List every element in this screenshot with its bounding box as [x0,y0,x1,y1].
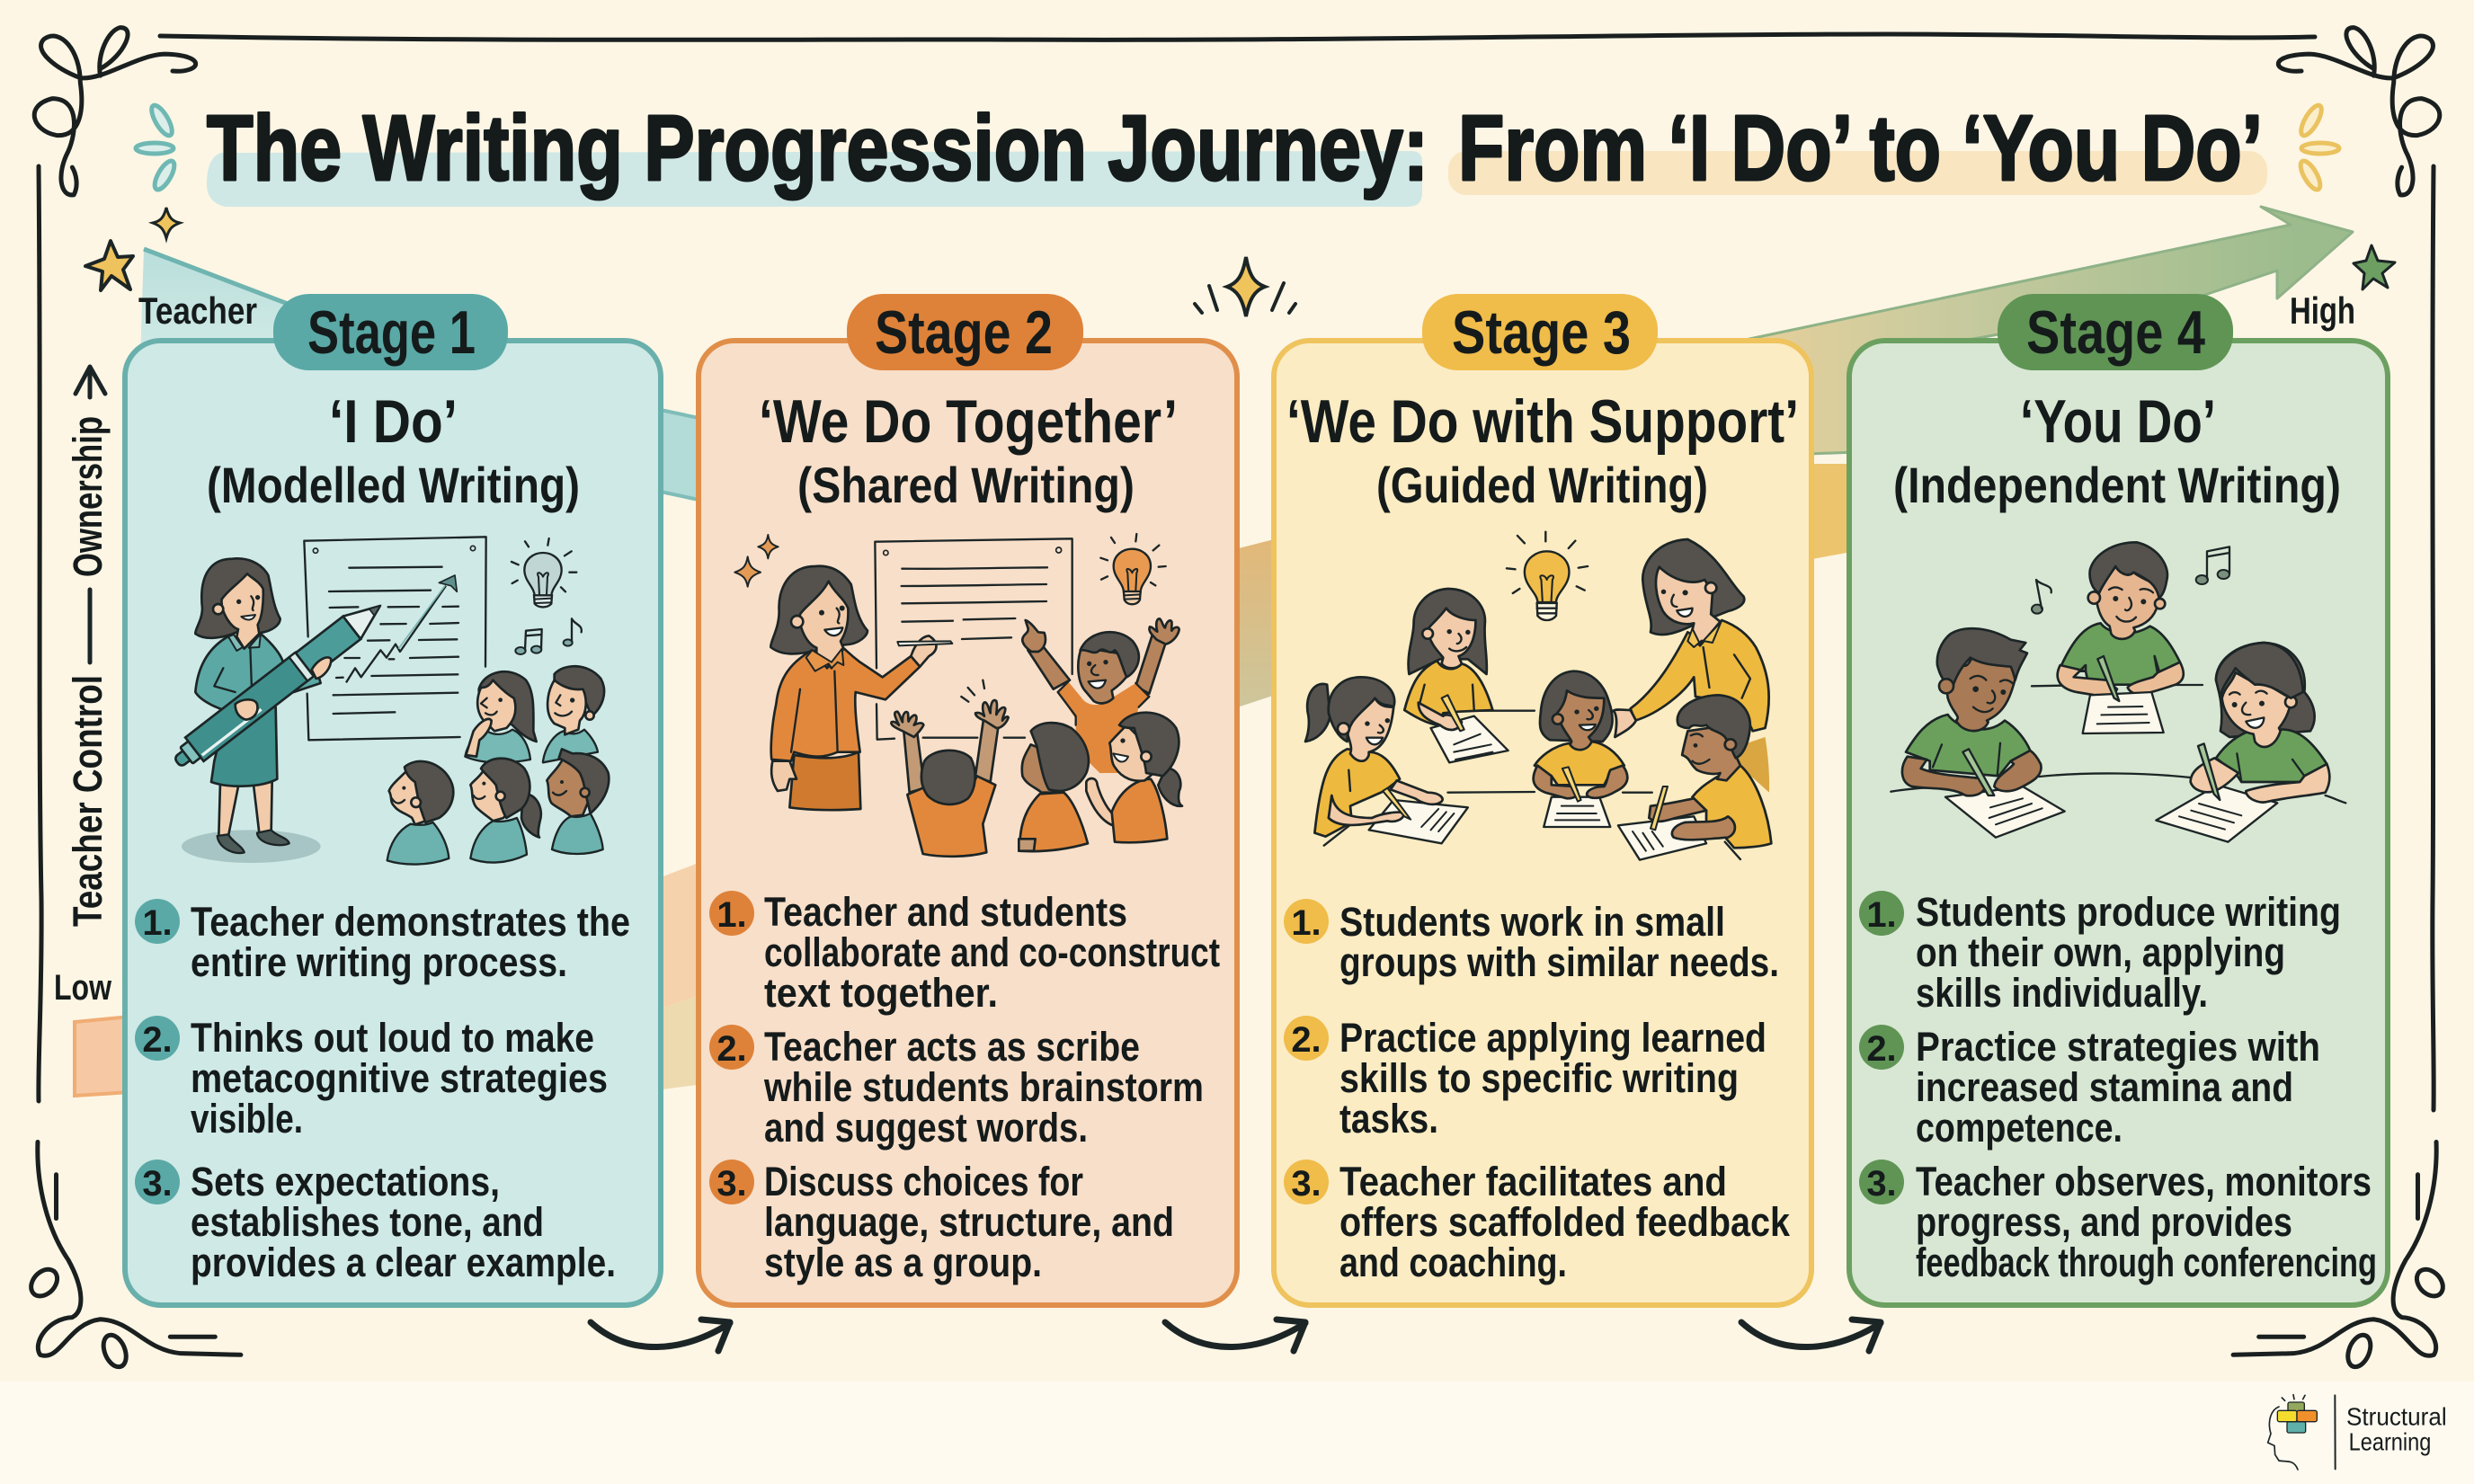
stage badge: Stage 3 [1452,298,1631,367]
hair back [195,558,280,638]
stage badge: Stage 2 [875,298,1053,367]
heading: ‘We Do with Support’ [1286,387,1799,456]
icon: light bulb [512,538,576,607]
heading [759,387,1178,513]
point list [135,899,630,1285]
pupil: left boy writing [1902,628,2065,838]
point 2: visible. [191,1096,303,1142]
point 3: 3. [142,1164,173,1204]
point 3: Teacher facilitates and [1339,1159,1727,1204]
pupil: right girl writing [2156,643,2329,842]
heading [1893,387,2341,513]
logo: structural learning: Structural [2346,1403,2447,1431]
pupil: centre back with raised hands [891,680,1009,857]
table edges [1324,711,1740,859]
heading: (Modelled Writing) [207,457,580,513]
illustration: independent writing pupils [1891,542,2345,842]
point 1 [135,899,630,985]
point 3: progress, and provides [1916,1199,2292,1245]
icon: bulb [1507,532,1588,620]
point 1 [1859,889,2341,1016]
pupil: boy looking up [543,666,604,762]
point 1 [1284,899,1779,985]
vertical axis: teacher control to ownership: Ownership [65,416,111,577]
point 2: and suggest words. [764,1105,1088,1151]
point 3: Discuss choices for [764,1159,1083,1204]
point 1: Students work in small [1339,899,1725,945]
whiteboard [875,538,1072,740]
pupil: front-right boy [547,749,609,854]
giant pen [168,594,389,775]
poster board [304,537,486,740]
illustration: modelled writing teacher with pupils [168,537,609,865]
point 2: metacognitive strategies [191,1055,608,1101]
arrow: stage 3 to stage 4 [1741,1320,1881,1351]
point 1: 1. [142,903,173,943]
vertical axis: teacher control to ownership [65,367,111,927]
point 3: Sets expectations, [191,1159,500,1204]
progress arrow: khaki band between stage 1 and 2 [656,994,703,1090]
title highlight: gold [1448,151,2267,195]
point 2 [709,1024,1204,1151]
point 2: while students brainstorm [763,1064,1204,1110]
teacher hand on pupil shoulder [1614,709,1636,737]
face [213,573,263,651]
point 1: groups with similar needs. [1339,939,1779,985]
point 2: 2. [1866,1029,1897,1069]
progress arrow: final green arrow [1737,207,2353,454]
pupil: centre girl [1534,671,1627,827]
table edges [1891,685,2345,803]
icon: sparkle above cards [1195,257,1295,316]
point 3: language, structure, and [764,1199,1174,1245]
point 2 [135,1015,608,1142]
point 1 [709,889,1220,1016]
heading: ‘We Do Together’ [759,387,1178,456]
point 1: Teacher and students [764,889,1127,935]
title: The Writing Progression Journey: [207,96,1428,200]
arrow: stage 2 to stage 3 [1165,1320,1305,1351]
blouse [195,634,321,713]
point 2: 2. [142,1020,173,1060]
point 2: Teacher acts as scribe [764,1024,1140,1070]
panel: stage 2 [699,294,1237,1305]
point 2: 2. [716,1029,747,1069]
point 1: on their own, applying [1916,929,2285,975]
axis label: high: High [2290,289,2355,332]
point 1: text together. [764,970,998,1016]
progress arrow: gold band between stage 3 and 4 [1807,464,1856,560]
card background [1849,341,2388,1305]
axis label: teacher: Teacher [138,289,257,332]
point 3: offers scaffolded feedback [1339,1199,1791,1245]
point 1: collaborate and co-construct [764,929,1220,975]
point 2 [1284,1015,1767,1142]
pupil: left ponytail girl [1305,677,1468,843]
point 3 [1859,1159,2377,1285]
heading: (Shared Writing) [797,457,1135,513]
card background [125,341,661,1305]
point 1: 1. [1291,903,1322,943]
icon: sparkles [734,535,779,587]
icon: music notes [515,618,582,654]
legs and shoes [218,782,289,853]
point list [1284,899,1791,1285]
point 3: 3. [1866,1164,1897,1204]
progress arrow: orange band between stage 1 and 2 [656,861,703,1010]
point 2: Practice strategies with [1916,1024,2320,1070]
arrow: stage 1 to stage 2 [591,1320,730,1351]
illustration: shared writing teacher with pupils [734,534,1182,857]
heading: (Independent Writing) [1893,457,2341,513]
point list [1859,889,2377,1285]
icon: gold title accent [2297,102,2339,192]
teacher [770,566,952,810]
panel: stage 4 [1849,294,2388,1305]
heading: (Guided Writing) [1376,457,1708,513]
icon: green star [2354,245,2395,289]
icon: gold star [85,241,133,290]
point 2: increased stamina and [1916,1064,2293,1110]
point 1: 1. [716,895,747,935]
point 3: provides a clear example. [191,1240,616,1285]
heading: ‘I Do’ [329,387,458,456]
point 1: Students produce writing [1916,889,2341,935]
vertical axis: teacher control to ownership: Teacher Control [65,675,111,927]
point 3 [135,1159,616,1285]
title highlight: teal [207,151,1422,207]
point 1: skills individually. [1916,970,2208,1016]
point 1: entire writing process. [191,939,567,985]
pupil: right boy [1618,695,1771,860]
icon: music notes [2032,547,2229,614]
axis label: low: Low [54,968,112,1008]
point 3 [709,1159,1174,1285]
point 3: style as a group. [764,1240,1042,1285]
point list [709,889,1220,1285]
card background [1274,341,1811,1305]
icon: teal title accent [136,102,178,192]
pupil: ponytail girl cheering [1086,713,1182,842]
progress arrow: orange band left of stage 1 [75,1017,130,1096]
stage badge: Stage 4 [2026,298,2205,367]
title: From ‘I Do’ to ‘You Do’ [1458,96,2263,200]
point 2: skills to specific writing [1339,1055,1739,1101]
heading [207,387,580,513]
logo: structural learning [2268,1395,2447,1470]
pupil: top boy writing [2058,542,2184,733]
point 3: establishes tone, and [191,1199,544,1245]
progress arrow: teal start wedge [140,249,306,360]
point 3: Teacher observes, monitors [1916,1159,2372,1204]
panel: stage 1 [125,294,661,1305]
logo: structural learning: Learning [2349,1427,2431,1455]
bulb icon [1100,534,1166,604]
pupil: thinking girl [465,671,537,762]
pupil: front-left boy [387,761,453,865]
progress arrow: gold band between stage 2 and 3 [1232,538,1281,709]
point 3: and coaching. [1339,1240,1567,1285]
point 3: 3. [716,1164,747,1204]
illustration: guided writing group [1305,532,1771,860]
point 2: Thinks out loud to make [191,1015,594,1061]
panel: stage 3 [1274,294,1811,1305]
point 3 [1284,1159,1791,1285]
skirt [211,701,277,786]
card background [699,341,1237,1305]
point 2: 2. [1291,1020,1322,1060]
point 1: 1. [1866,895,1897,935]
icon: small gold sparkle [153,208,180,238]
point 1: Teacher demonstrates the [191,899,630,945]
teacher hands [236,657,331,720]
stage badge: Stage 1 [307,298,476,367]
pupil: back view curly hair [1019,723,1089,851]
point 2 [1859,1024,2320,1151]
point 2: competence. [1916,1105,2122,1151]
floor shadow [182,830,321,863]
progress arrow: teal band between stage 1 and 2 [656,409,703,501]
pupil: top right boy cheering [1022,618,1179,773]
point 2: tasks. [1339,1096,1438,1142]
point 2: Practice applying learned [1339,1015,1767,1061]
teacher [1631,539,1769,793]
point 3: 3. [1291,1164,1322,1204]
heading: ‘You Do’ [2020,387,2216,456]
pupil: top girl [1404,589,1508,762]
heading [1286,387,1799,513]
progress arrow: teal wedge edge [144,249,288,304]
pupil: ponytail girl [470,759,541,863]
